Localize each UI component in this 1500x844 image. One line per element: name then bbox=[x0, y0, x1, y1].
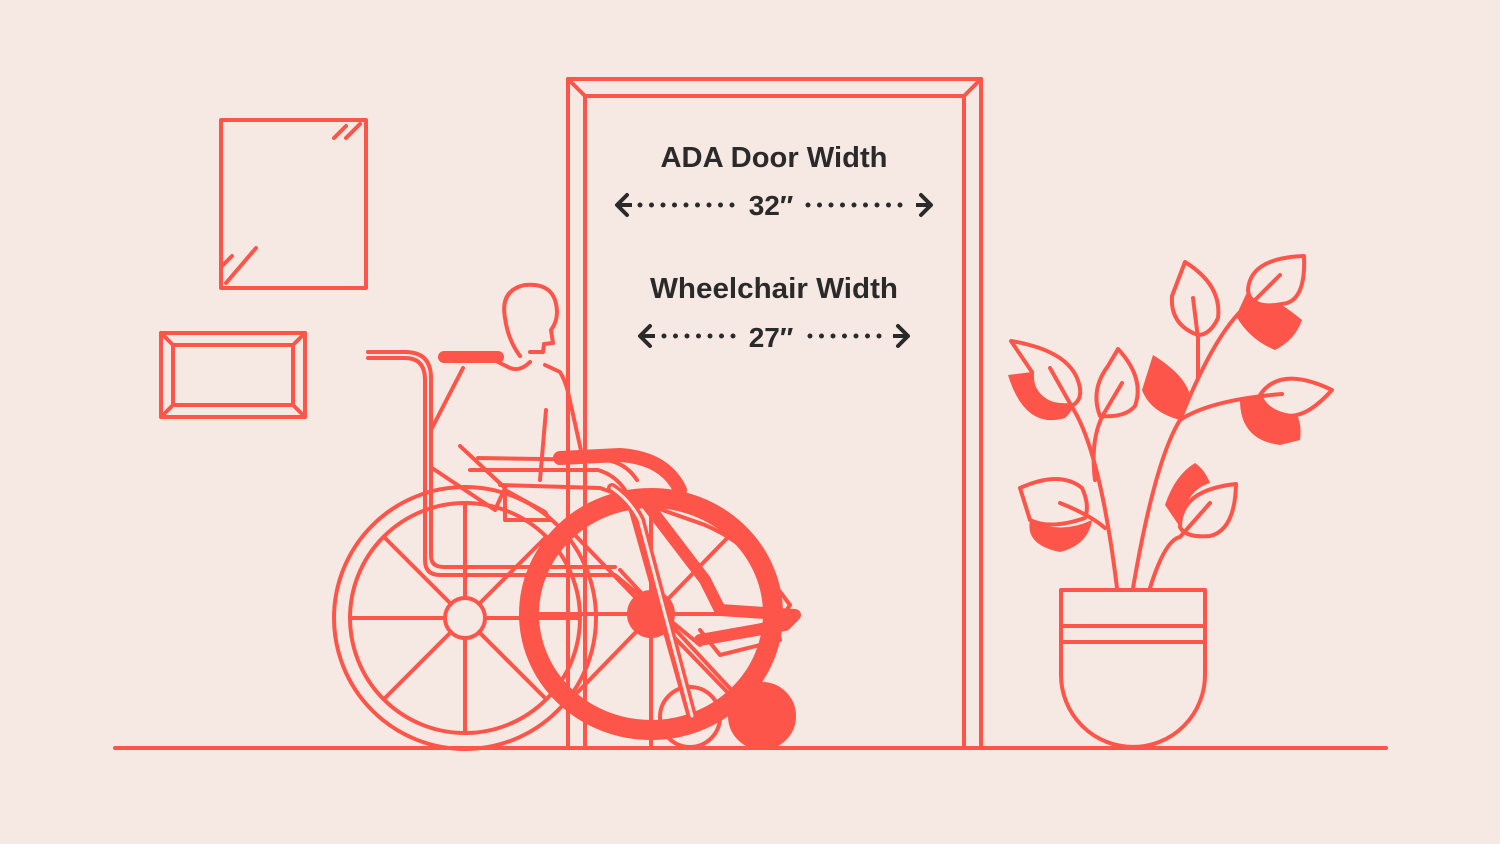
door frame bbox=[568, 79, 981, 748]
caster wheels bbox=[612, 488, 794, 748]
plant stems and leaves bbox=[1011, 256, 1332, 588]
dimension arrow: 27 inches: 27″ bbox=[749, 322, 793, 353]
dimension arrow: 27 inches bbox=[640, 322, 908, 353]
dimension arrow: 32 inches: 32″ bbox=[749, 190, 793, 221]
dimension arrow: 32 inches bbox=[617, 190, 931, 221]
picture frame: rectangle bbox=[161, 333, 305, 417]
heading: Wheelchair Width: Wheelchair Width bbox=[650, 273, 898, 305]
floor line bbox=[115, 746, 1386, 750]
wheelchair front wheel bbox=[334, 487, 596, 749]
wheelchair frame and person bbox=[368, 285, 795, 714]
picture frame: square bbox=[221, 120, 366, 288]
plant pot bbox=[1061, 590, 1205, 747]
heading: ADA Door Width: ADA Door Width bbox=[660, 142, 888, 174]
wheelchair far wheel bbox=[529, 498, 773, 745]
